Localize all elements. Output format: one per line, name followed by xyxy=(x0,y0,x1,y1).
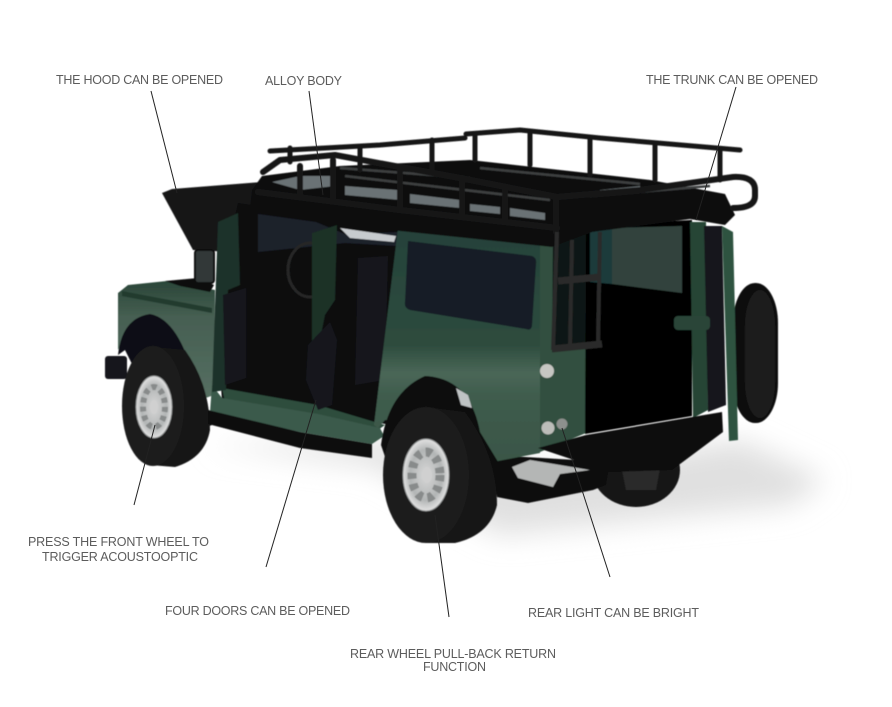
cargo opening xyxy=(585,220,692,434)
rear bumper xyxy=(538,412,723,472)
front wheel arch xyxy=(118,314,212,440)
seat xyxy=(355,256,388,385)
label: front wheel: TRIGGER ACOUSTOOPTIC xyxy=(42,550,198,564)
tow hitch xyxy=(622,468,660,490)
fender stripe xyxy=(122,291,212,313)
label: trunk: THE TRUNK CAN BE OPENED xyxy=(646,73,818,87)
leader line: trunk xyxy=(696,87,736,220)
label: rear light: REAR LIGHT CAN BE BRIGHT xyxy=(528,606,699,620)
side window xyxy=(405,241,536,330)
front fender xyxy=(118,281,215,400)
sill xyxy=(210,385,384,444)
roof slats xyxy=(340,168,710,200)
front bumper end xyxy=(105,356,127,379)
roof rack xyxy=(258,130,755,232)
ladder backing xyxy=(552,230,600,352)
door floor xyxy=(222,388,385,432)
label: front wheel: PRESS THE FRONT WHEEL TO xyxy=(28,535,209,549)
exhaust xyxy=(512,460,590,487)
wing mirror xyxy=(195,250,214,283)
body side xyxy=(374,228,552,462)
label: rear wheel: REAR WHEEL PULL-BACK RETURN xyxy=(350,647,556,661)
leader line: rear wheel xyxy=(435,515,449,617)
rear door hardware xyxy=(704,226,726,412)
ground shadow xyxy=(205,440,825,535)
model car xyxy=(105,130,778,543)
leader line: hood xyxy=(151,91,177,193)
rear face xyxy=(540,234,592,452)
rear wheel arch xyxy=(381,376,500,510)
label: four doors: FOUR DOORS CAN BE OPENED xyxy=(165,604,350,618)
opened rear door xyxy=(722,226,738,441)
roof panel highlights xyxy=(272,176,640,220)
cabin interior xyxy=(216,203,400,425)
engine bay xyxy=(165,278,214,292)
roof xyxy=(250,160,735,247)
side step xyxy=(208,410,372,458)
leader line: doors xyxy=(266,400,316,567)
rear ladder xyxy=(552,232,602,350)
leader line: alloy body xyxy=(309,91,323,195)
chassis xyxy=(490,455,610,503)
label: rear wheel xyxy=(350,647,556,674)
windshield view xyxy=(258,214,398,252)
leader line: front wheel xyxy=(134,425,155,505)
leader line: rear light xyxy=(562,428,610,577)
opened hood xyxy=(162,182,262,252)
rear passenger door xyxy=(306,225,337,410)
arch highlight xyxy=(456,388,472,408)
door hinge xyxy=(674,316,710,330)
rear wheel xyxy=(383,407,497,543)
label: front wheel xyxy=(28,535,209,564)
front door xyxy=(212,213,246,392)
label: rear wheel: FUNCTION xyxy=(423,660,486,674)
rear lights xyxy=(540,364,568,434)
far rear wheel xyxy=(592,433,680,507)
label: hood: THE HOOD CAN BE OPENED xyxy=(56,73,223,87)
glare on far window xyxy=(340,228,396,242)
rear door frame xyxy=(690,222,708,418)
label: alloy body: ALLOY BODY xyxy=(265,74,343,88)
spare wheel xyxy=(733,283,778,423)
front wheel xyxy=(122,346,210,467)
steering wheel xyxy=(288,243,332,297)
